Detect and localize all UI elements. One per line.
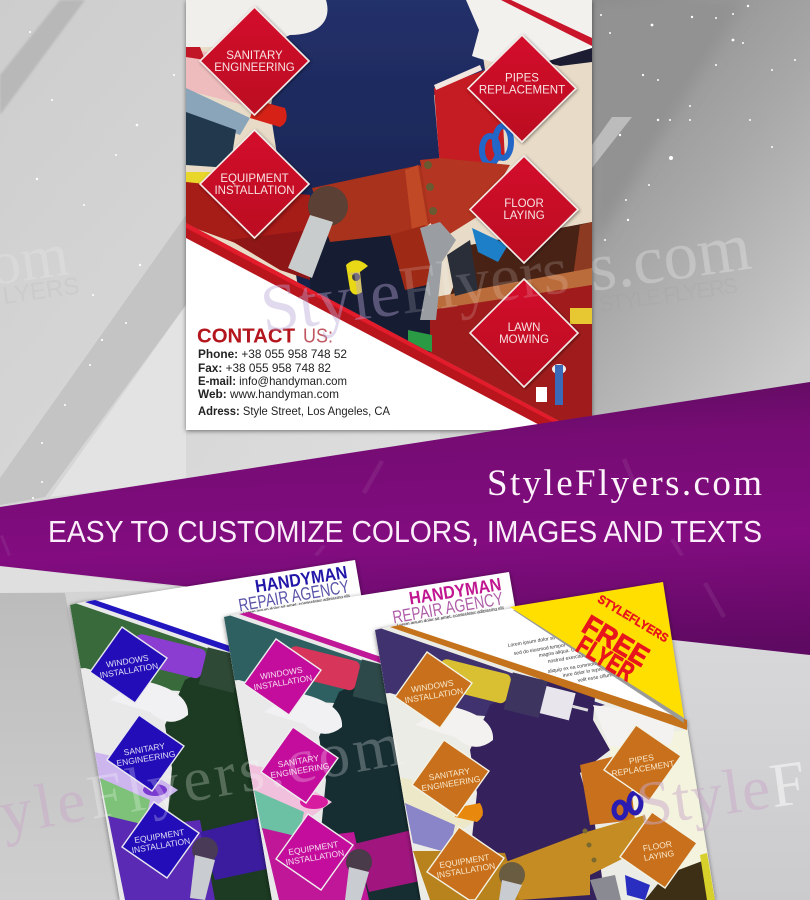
diamond: lawn mowing: LAWN (508, 322, 540, 334)
diamond: floor laying (620, 812, 697, 888)
magenta flyer header (391, 574, 505, 628)
diamond: equipment installation: INSTALLATION (436, 861, 496, 880)
diamond: sanitary engineering (261, 727, 338, 803)
diamond: equipment installation: INSTALLATION (285, 848, 345, 867)
corner label (571, 592, 671, 687)
contact block (197, 326, 390, 418)
orange flyer lorem text: nostrud exercitation ullamco (547, 649, 610, 665)
orange flyer lorem text: velit esse cillum dolore (577, 670, 628, 684)
yellow clip (346, 260, 368, 295)
diamond: sanitary engineering (107, 715, 184, 791)
diamond: equipment installation (427, 827, 504, 900)
diamond: windows installation (244, 639, 321, 715)
watermark: lower StyleFlyers.com: StyleF (632, 747, 810, 840)
diamond: windows installation (395, 652, 472, 728)
contact details: Adress: Style Street, Los Angeles, CA (198, 404, 390, 418)
pouch (450, 222, 592, 294)
contact details (198, 347, 390, 418)
contact heading: CONTACT (197, 326, 295, 348)
blue flyer header: HANDYMAN (254, 562, 349, 596)
watermark: over main flyer: StyleFlyers (256, 231, 573, 347)
orange flyer lorem text (507, 628, 628, 684)
panel: magenta flyer variant (221, 571, 517, 900)
purple banner (0, 382, 810, 655)
background speckles (29, 5, 796, 499)
diamond: equipment installation: INSTALLATION (214, 185, 295, 197)
diamond: floor laying: FLOOR (642, 839, 673, 853)
diamond: sanitary engineering: SANITARY (123, 741, 166, 757)
corner label: FREE (577, 609, 655, 673)
diamond: equipment installation (276, 814, 353, 890)
watermark: upper StyleFlyers.com: s.com (584, 208, 755, 306)
magenta flyer header: REPAIR AGENCY (391, 588, 505, 627)
diamond: windows installation: INSTALLATION (253, 673, 313, 692)
blue flyer photo (70, 600, 272, 900)
diamond: pipes replacement: REPLACEMENT (479, 84, 565, 96)
diamond: windows installation: INSTALLATION (99, 661, 159, 680)
red diagonal band (186, 223, 576, 430)
contact heading: US: (303, 326, 333, 348)
diamond: floor laying: LAYING (503, 210, 545, 222)
watermark: upper StyleFlyers.com: STYLE FLYERS (597, 273, 739, 317)
diamond: sanitary engineering: ENGINEERING (421, 774, 481, 793)
magenta flyer header: HANDYMAN (408, 574, 503, 608)
diamond: sanitary engineering: ENGINEERING (214, 62, 295, 74)
blue flyer header: Lorem ipsum dolor sit amet, consectetur adipiscing elit (243, 593, 351, 616)
orange flyer stripe (390, 625, 687, 730)
diamond: floor laying (470, 156, 578, 263)
magenta flyer header: Lorem ipsum dolor sit amet, consectetur adipiscing elit (397, 605, 505, 628)
white gloves (186, 0, 328, 48)
blue flyer header (237, 562, 351, 616)
diamond: windows installation: INSTALLATION (404, 686, 464, 705)
diamond: sanitary engineering: ENGINEERING (270, 761, 330, 780)
orange flyer lorem text: irure dolor in reprehenderit (562, 663, 622, 679)
blue scissors (482, 126, 511, 164)
banner brand name: StyleFlyers.com (487, 463, 762, 504)
diamond: sanitary engineering (412, 740, 489, 816)
diamond: pipes replacement (604, 725, 681, 801)
orange flyer lorem text: sed do eiusmod tempor incididunt ut (513, 638, 594, 657)
blue flyer stripe (85, 600, 380, 704)
diamond: pipes replacement: PIPES (505, 72, 539, 84)
orange flyer photo (365, 620, 735, 900)
diamond: sanitary engineering: SANITARY (226, 50, 283, 62)
diamond: equipment installation: EQUIPMENT (134, 827, 185, 845)
panel: main red handyman flyer (186, 0, 592, 430)
diamond: windows installation: WINDOWS (410, 678, 455, 695)
orange flyer lorem text: Lorem ipsum dolor sit amet, consectetur (507, 628, 596, 649)
corner label: STYLEFLYERS (595, 592, 671, 645)
magenta flyer photo (224, 612, 421, 900)
small tools (408, 330, 432, 352)
belt (312, 165, 440, 242)
red notebook (434, 65, 505, 168)
yellow free flyer corner (510, 582, 684, 723)
watermark: lower StyleFlyers.com (0, 708, 810, 859)
diamond: equipment installation: EQUIPMENT (439, 852, 490, 870)
diamond: pipes replacement (468, 35, 576, 142)
watermark: upper StyleFlyers.com (0, 208, 755, 317)
magenta flyer stripe (239, 612, 534, 716)
diamond: sanitary engineering: SANITARY (428, 766, 471, 782)
diamond: equipment installation (122, 802, 199, 878)
panel: blue flyer variant (68, 559, 363, 900)
diamond: lawn mowing: MOWING (499, 334, 549, 346)
diamond: equipment installation (200, 130, 309, 238)
watermark: upper StyleFlyers.com: LYERS (1, 272, 81, 310)
left tools (186, 50, 243, 105)
diamond: floor laying: LAYING (643, 848, 675, 863)
overalls (271, 0, 485, 355)
diamond: windows installation: WINDOWS (105, 653, 150, 670)
photo: handyman tool belt (186, 0, 592, 430)
blue flyer header: REPAIR AGENCY (237, 576, 351, 615)
contact details: Phone: +38 055 958 748 52 (198, 347, 347, 361)
diamond: equipment installation: INSTALLATION (131, 836, 191, 855)
panel: orange flyer variant (365, 582, 735, 900)
diamond: equipment installation: EQUIPMENT (288, 839, 339, 857)
wrench (308, 186, 348, 226)
diamond: equipment installation: EQUIPMENT (220, 173, 289, 185)
orange flyer lorem text: aliquip ex ea commodo consequat (547, 656, 624, 675)
contact details: Fax: +38 055 958 748 82 (198, 361, 331, 375)
diamond: floor laying: FLOOR (504, 198, 544, 210)
banner tagline: EASY TO CUSTOMIZE COLORS, IMAGES AND TEXTS (48, 514, 762, 549)
corner label: FLYER (571, 629, 640, 687)
pliers (420, 222, 456, 320)
diamond: sanitary engineering (200, 7, 309, 115)
contact details: Web: www.handyman.com (198, 387, 339, 401)
diamond: windows installation: WINDOWS (259, 665, 304, 682)
orange flyer lorem text: magna aliqua. Ut enim ad minim (538, 641, 610, 659)
diamond: sanitary engineering: SANITARY (277, 753, 320, 769)
diamond: windows installation (90, 627, 167, 703)
contact details: E-mail: info@handyman.com (198, 374, 347, 388)
diamond: sanitary engineering: ENGINEERING (116, 749, 176, 768)
diamond: pipes replacement: REPLACEMENT (611, 758, 675, 779)
diamond: lawn mowing (470, 279, 578, 387)
diamond: pipes replacement: PIPES (628, 752, 655, 766)
